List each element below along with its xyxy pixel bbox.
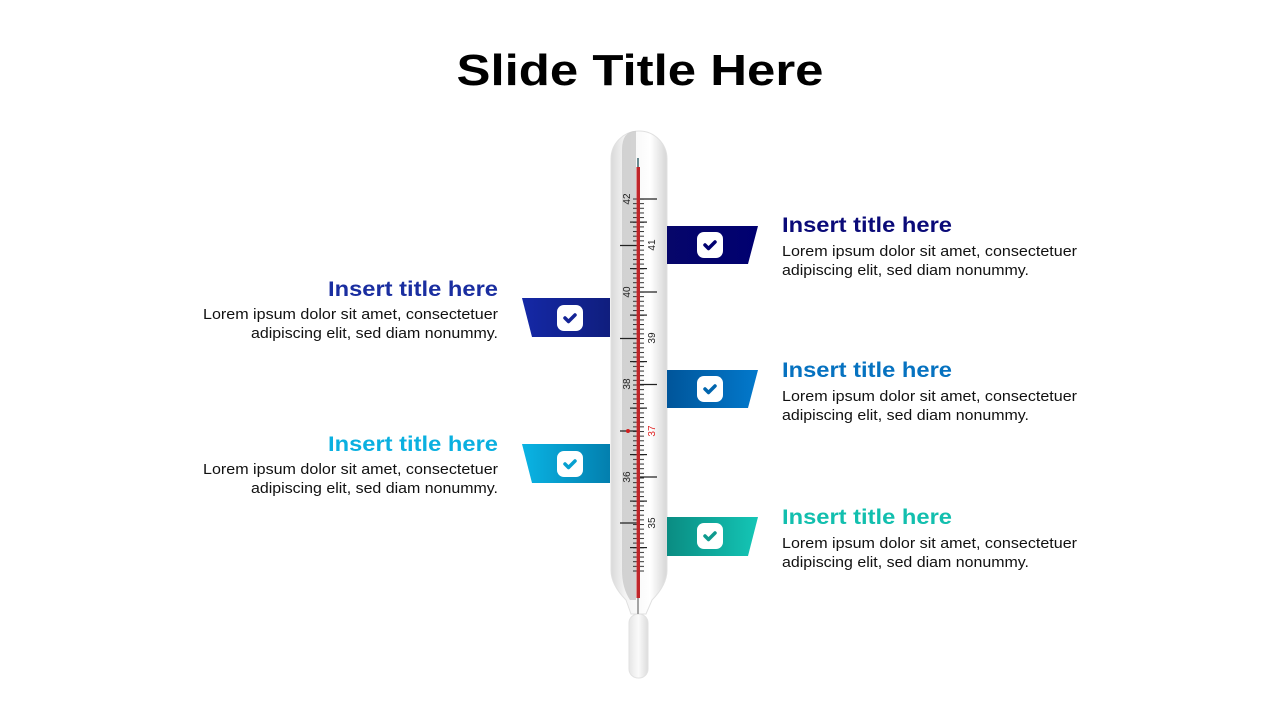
text block left 1 <box>203 278 498 342</box>
bulb tip <box>629 614 648 678</box>
text block right 2: adipiscing elit, sed diam nonummy. <box>782 407 1029 424</box>
thermometer <box>611 131 667 678</box>
scale labels: 38 <box>622 378 633 390</box>
text block left 2 <box>203 433 498 497</box>
text block right 3: adipiscing elit, sed diam nonummy. <box>782 554 1029 571</box>
glass tube <box>611 131 667 614</box>
text block right 1: adipiscing elit, sed diam nonummy. <box>782 262 1029 279</box>
text block right 1 <box>782 214 1077 279</box>
scale labels: 36 <box>622 471 633 483</box>
scale labels: 42 <box>622 193 633 205</box>
scale labels: 39 <box>647 332 658 344</box>
tab left 2 <box>522 444 610 483</box>
text block right 3: Lorem ipsum dolor sit amet, consectetuer <box>782 535 1077 552</box>
text block right 2 <box>782 359 1077 424</box>
scale labels: 37 <box>647 425 658 437</box>
text block left 2: Lorem ipsum dolor sit amet, consectetuer <box>203 461 498 478</box>
tab left 1 <box>522 298 610 337</box>
text block right 2: Insert title here <box>782 359 952 382</box>
scale labels <box>622 193 658 529</box>
text block right 3: Insert title here <box>782 506 952 529</box>
text block left 1: adipiscing elit, sed diam nonummy. <box>251 325 498 342</box>
scale labels: 35 <box>647 517 658 529</box>
text block right 3 <box>782 506 1077 571</box>
text block left 2: Insert title here <box>328 433 498 456</box>
tab right 3 <box>667 517 758 556</box>
mercury <box>637 158 639 168</box>
text block left 2: adipiscing elit, sed diam nonummy. <box>251 480 498 497</box>
tab right 2 <box>667 370 758 408</box>
text block left 1: Insert title here <box>328 278 498 301</box>
text block right 1: Lorem ipsum dolor sit amet, consectetuer <box>782 243 1077 260</box>
scale labels: 40 <box>622 286 633 298</box>
tab right 1 <box>667 226 758 264</box>
scale labels: 41 <box>647 239 658 251</box>
title: Slide Title Here <box>456 46 824 95</box>
scale ticks <box>633 198 644 573</box>
text block right 1: Insert title here <box>782 214 952 237</box>
text block left 1: Lorem ipsum dolor sit amet, consectetuer <box>203 306 498 323</box>
text block right 2: Lorem ipsum dolor sit amet, consectetuer <box>782 388 1077 405</box>
